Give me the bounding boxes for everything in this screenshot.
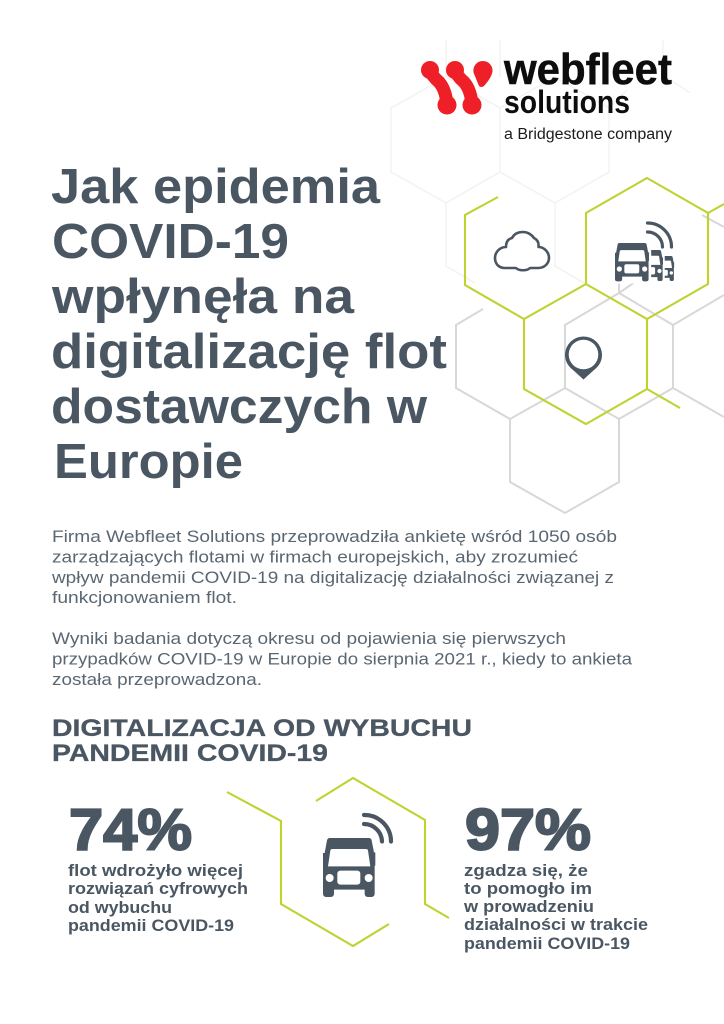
icon: cloud (495, 232, 549, 270)
intro paragraph 1: funkcjonowaniem flot. (52, 589, 237, 607)
title: Europie (54, 434, 243, 489)
title: wpłynęła na (51, 269, 355, 324)
intro paragraph 2: przypadków COVID-19 w Europie do sierpnia 2021 r., kiedy to ankieta (52, 650, 633, 668)
stat description: to pomogło im (464, 880, 592, 898)
background hexagon network: grey (456, 215, 724, 513)
icon: trucks with signal (613, 223, 674, 284)
stat description: od wybuchu (68, 899, 172, 917)
signal arcs (648, 223, 672, 247)
logo wordmark second line: solutions (504, 84, 630, 120)
intro paragraph 1: wpływ pandemii COVID-19 na digitalizację działalności związanej z (51, 569, 614, 587)
intro paragraph 1 (51, 528, 617, 607)
stat description: pandemii COVID-19 (68, 917, 234, 935)
middle truck (634, 248, 665, 283)
stat description (463, 862, 648, 953)
stat description (68, 862, 248, 935)
stat number 97%: 97% (465, 798, 591, 862)
stat description: działalności w trakcie (464, 916, 648, 934)
intro paragraph 2: została przeprowadzona. (52, 671, 262, 689)
far truck (652, 256, 674, 281)
stat description: pandemii COVID-19 (464, 935, 630, 953)
section heading: DIGITALIZACJA OD WYBUCHU (52, 715, 472, 742)
stat description: zgadza się, że (464, 862, 588, 880)
icon: location pin (565, 336, 602, 380)
logo tagline: a Bridgestone company (504, 126, 672, 143)
logo wordmark: webfleet (503, 45, 672, 94)
signal arcs (364, 815, 391, 842)
stat: 74% (68, 798, 248, 935)
section heading (52, 715, 472, 767)
truck (323, 838, 375, 897)
logo: Webfleet Solutions (421, 45, 672, 143)
stat description: w prowadzeniu (463, 898, 594, 916)
stat description: rozwiązań cyfrowych (68, 880, 248, 898)
intro paragraph 1: zarządzających flotami w firmach europejskich, aby zrozumieć (52, 548, 578, 566)
stat description: flot wdrożyło więcej (68, 862, 243, 880)
title: COVID-19 (52, 214, 289, 269)
title (51, 159, 447, 489)
title: dostawczych w (51, 379, 428, 434)
section heading: PANDEMII COVID-19 (52, 740, 328, 767)
background hexagon network: light (391, 40, 690, 284)
green hexagon outlines (465, 178, 724, 424)
icon: truck with signal (323, 815, 391, 897)
intro paragraph 2 (52, 630, 633, 689)
icon: red logo mark (421, 61, 493, 114)
stat number 74%: 74% (69, 798, 192, 862)
title: digitalizację flot (51, 324, 447, 379)
stat: 97% (463, 798, 648, 953)
title: Jak epidemia (51, 159, 380, 214)
intro paragraph 2: Wyniki badania dotyczą okresu od pojawienia się pierwszych (52, 630, 566, 648)
front truck (613, 241, 651, 284)
central green hexagon (227, 778, 449, 946)
intro paragraph 1: Firma Webfleet Solutions przeprowadziła ankietę wśród 1050 osób (52, 528, 617, 546)
